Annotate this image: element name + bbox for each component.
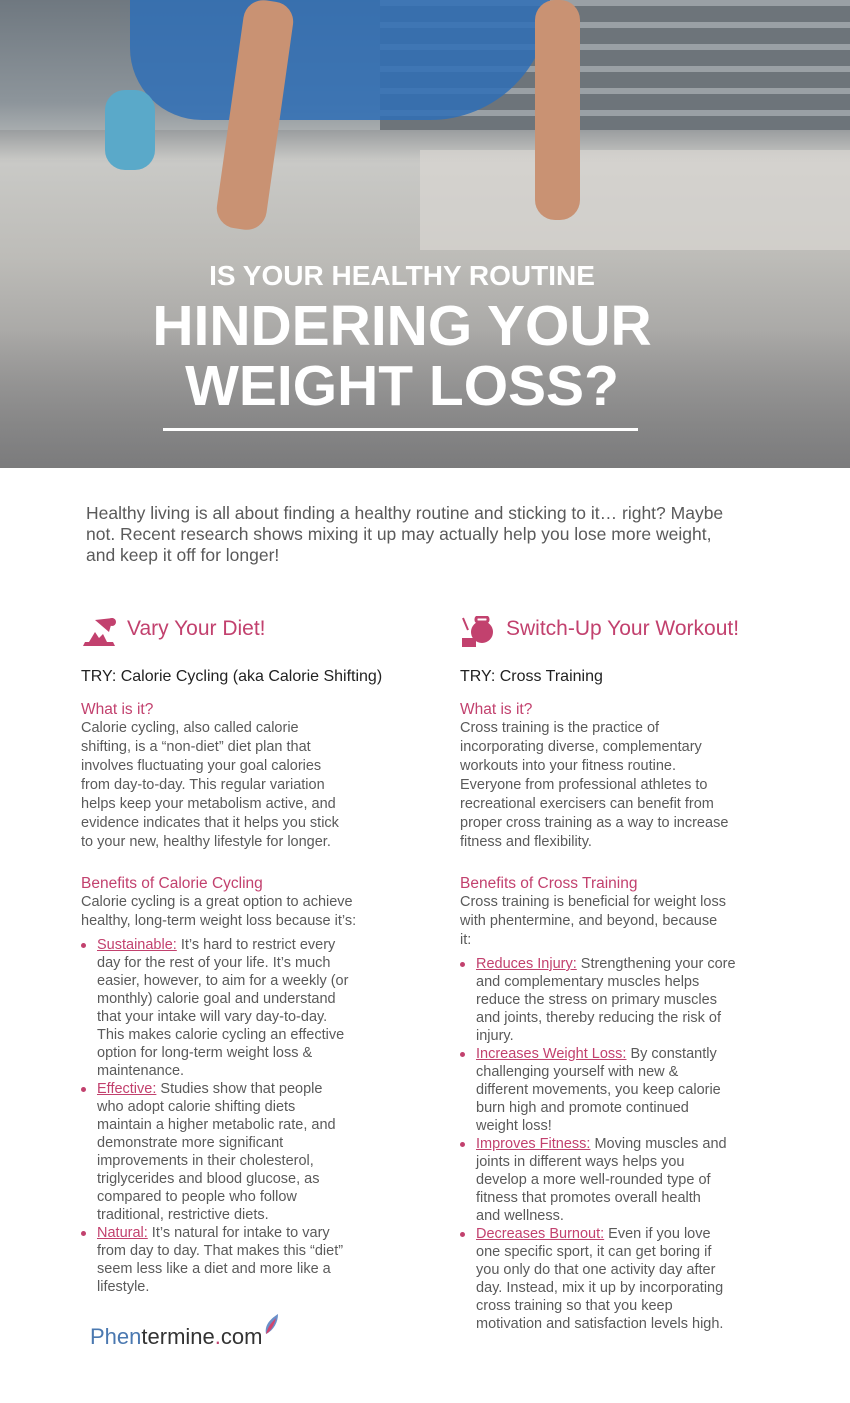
benefits xyxy=(81,875,356,1295)
title xyxy=(152,260,652,418)
benefits: demonstrate more significant xyxy=(97,1135,283,1151)
benefits: Increases Weight Loss: By constantly xyxy=(476,1046,717,1062)
benefits: you only do that one activity day after xyxy=(476,1262,715,1278)
benefits: and wellness. xyxy=(476,1208,564,1224)
logo: Phentermine.com xyxy=(90,1324,262,1349)
athlete figure xyxy=(130,0,550,120)
what is it: What is it? xyxy=(460,701,532,718)
what is it: fitness and flexibility. xyxy=(460,834,592,850)
benefits: monthly) calorie goal and understand xyxy=(97,991,336,1007)
benefits: fitness that promotes overall health xyxy=(476,1190,701,1206)
what is it xyxy=(460,701,728,850)
benefits: and complementary muscles helps xyxy=(476,974,699,990)
what is it: helps keep your metabolism active, and xyxy=(81,796,336,812)
benefits: Benefits of Calorie Cycling xyxy=(81,875,263,892)
icon: leaf xyxy=(266,1314,278,1334)
benefits: Reduces Injury: Strengthening your core xyxy=(476,956,736,972)
what is it xyxy=(81,701,339,850)
ground shadow xyxy=(0,130,850,160)
benefits: Improves Fitness: Moving muscles and xyxy=(476,1136,727,1152)
what is it: Calorie cycling, also called calorie xyxy=(81,720,299,736)
benefits: healthy, long-term weight loss because it’s: xyxy=(81,913,356,929)
benefits: Cross training is beneficial for weight loss xyxy=(460,894,726,910)
benefits: maintain a higher metabolic rate, and xyxy=(97,1117,336,1133)
benefits: compared to people who follow xyxy=(97,1189,297,1205)
intro text: not. Recent research shows mixing it up may actually help you lose more weight, xyxy=(86,524,711,544)
icon: kettlebell xyxy=(462,616,493,647)
benefits: with phentermine, and beyond, because xyxy=(460,913,717,929)
what is it: What is it? xyxy=(81,701,153,718)
benefits: Benefits of Cross Training xyxy=(460,875,637,892)
title: IS YOUR HEALTHY ROUTINE xyxy=(209,260,595,291)
heading: Switch-Up Your Workout! xyxy=(506,617,739,640)
benefits: weight loss! xyxy=(476,1118,552,1134)
benefits: it: xyxy=(460,932,471,948)
left column: vary your diet xyxy=(81,617,382,1295)
railing background xyxy=(380,0,850,130)
benefits: improvements in their cholesterol, xyxy=(97,1153,314,1169)
what is it: proper cross training as a way to increase xyxy=(460,815,728,831)
what is it: shifting, is a “non-diet” diet plan that xyxy=(81,739,311,755)
benefits: Effective: Studies show that people xyxy=(97,1081,322,1097)
intro text: Healthy living is all about finding a healthy routine and sticking to it… right? Maybe xyxy=(86,503,723,523)
benefits: maintenance. xyxy=(97,1063,184,1079)
benefits: different movements, you keep calorie xyxy=(476,1082,721,1098)
benefits xyxy=(460,875,736,1332)
benefits: cross training so that you keep xyxy=(476,1298,673,1314)
benefits: motivation and satisfaction levels high. xyxy=(476,1316,723,1332)
what is it: incorporating diverse, complementary xyxy=(460,739,702,755)
benefits: joints in different ways helps you xyxy=(476,1154,684,1170)
bottom darkening xyxy=(0,330,850,468)
benefits: and joints, thereby reducing the risk of xyxy=(476,1010,721,1026)
what is it: evidence indicates that it helps you stick xyxy=(81,815,339,831)
icon: food xyxy=(83,618,116,646)
hero photo banner xyxy=(0,0,850,468)
benefits: easier, however, to aim for a weekly (or xyxy=(97,973,348,989)
intro text: and keep it off for longer! xyxy=(86,545,279,565)
benefits: Natural: It’s natural for intake to vary xyxy=(97,1225,330,1241)
benefits: injury. xyxy=(476,1028,514,1044)
benefits: lifestyle. xyxy=(97,1279,149,1295)
benefits: burn high and promote continued xyxy=(476,1100,689,1116)
benefits: day for the rest of your life. It’s much xyxy=(97,955,330,971)
what is it: to your new, healthy lifestyle for longer. xyxy=(81,834,331,850)
what is it: Cross training is the practice of xyxy=(460,720,659,736)
benefits: Calorie cycling is a great option to achieve xyxy=(81,894,353,910)
title: HINDERING YOUR xyxy=(152,294,652,358)
try line: TRY: Calorie Cycling (aka Calorie Shifting) xyxy=(81,668,382,685)
what is it: from day-to-day. This regular variation xyxy=(81,777,325,793)
try line: TRY: Cross Training xyxy=(460,668,603,685)
underline xyxy=(163,428,638,431)
logo xyxy=(90,1314,278,1349)
benefits: This makes calorie cycling an effective xyxy=(97,1027,344,1043)
benefits: reduce the stress on primary muscles xyxy=(476,992,717,1008)
heading: Vary Your Diet! xyxy=(127,617,266,640)
title: WEIGHT LOSS? xyxy=(185,354,619,418)
benefits: Sustainable: It’s hard to restrict every xyxy=(97,937,335,953)
benefits: traditional, restrictive diets. xyxy=(97,1207,269,1223)
right column: switch up workout xyxy=(460,616,739,1332)
intro text xyxy=(86,503,723,565)
benefits: develop a more well-rounded type of xyxy=(476,1172,711,1188)
benefits: who adopt calorie shifting diets xyxy=(97,1099,295,1115)
benefits: challenging yourself with new & xyxy=(476,1064,678,1080)
what is it: involves fluctuating your goal calories xyxy=(81,758,321,774)
benefits: Decreases Burnout: Even if you love xyxy=(476,1226,711,1242)
benefits: that your intake will vary day-to-day. xyxy=(97,1009,327,1025)
benefits: from day to day. That makes this “diet” xyxy=(97,1243,343,1259)
what is it: recreational exercisers can benefit from xyxy=(460,796,714,812)
benefits: seem less like a diet and more like a xyxy=(97,1261,331,1277)
what is it: Everyone from professional athletes to xyxy=(460,777,707,793)
benefits: one specific sport, it can get boring if xyxy=(476,1244,711,1260)
benefits: day. Instead, mix it up by incorporating xyxy=(476,1280,723,1296)
benefits: triglycerides and blood glucose, as xyxy=(97,1171,319,1187)
bright patch xyxy=(420,150,850,250)
benefits: option for long-term weight loss & xyxy=(97,1045,312,1061)
what is it: workouts into your fitness routine. xyxy=(460,758,676,774)
